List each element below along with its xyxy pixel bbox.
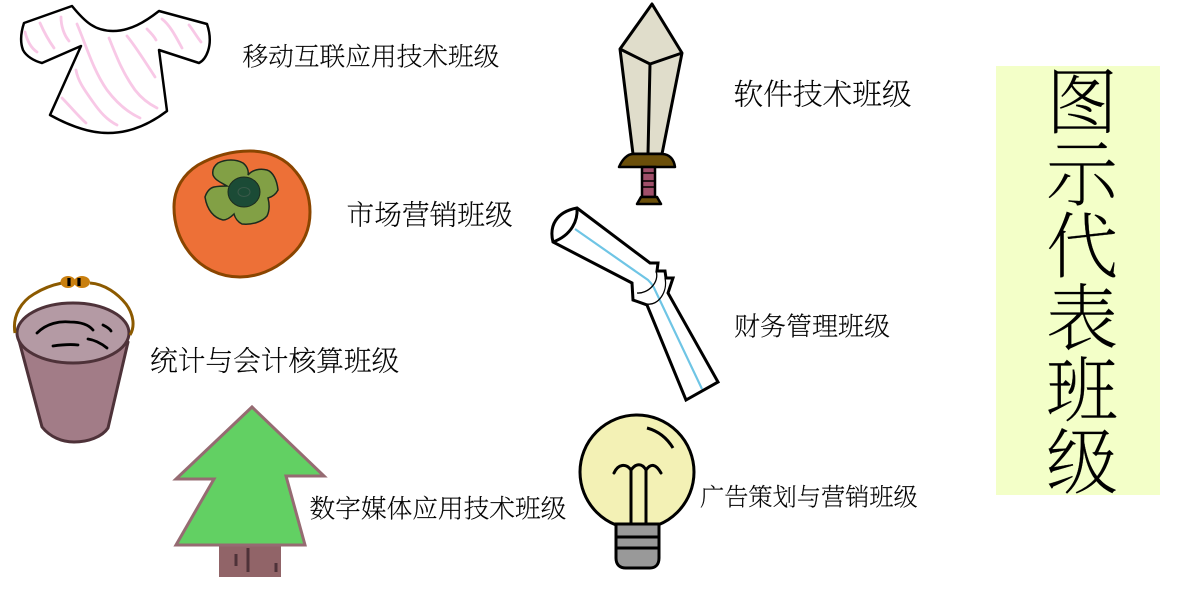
title: 级 [1046,424,1118,504]
label: statistics and accounting class: 统计与会计核算班级 [150,346,399,376]
icon: shirt [21,6,210,133]
icon: persimmon [174,151,310,277]
title [1046,64,1118,504]
icon: bucket [14,276,133,442]
title: 示 [1046,136,1118,216]
label: advertising class: 广告策划与营销班级 [700,484,918,512]
title: 表 [1046,280,1118,360]
label: marketing class: 市场营销班级 [346,200,513,230]
icon: tree [176,407,324,577]
label: software class: 软件技术班级 [734,78,912,112]
label: digital media class: 数字媒体应用技术班级 [310,494,566,524]
label: mobile internet class: 移动互联应用技术班级 [242,42,499,72]
title: 班 [1046,352,1118,432]
title: 代 [1046,208,1118,288]
title panel [996,64,1160,504]
label: finance management class: 财务管理班级 [734,312,890,342]
icon: sword [619,4,682,204]
icon: broken pipe [552,208,718,400]
icon: light bulb [580,415,694,568]
title: 图 [1046,64,1118,144]
